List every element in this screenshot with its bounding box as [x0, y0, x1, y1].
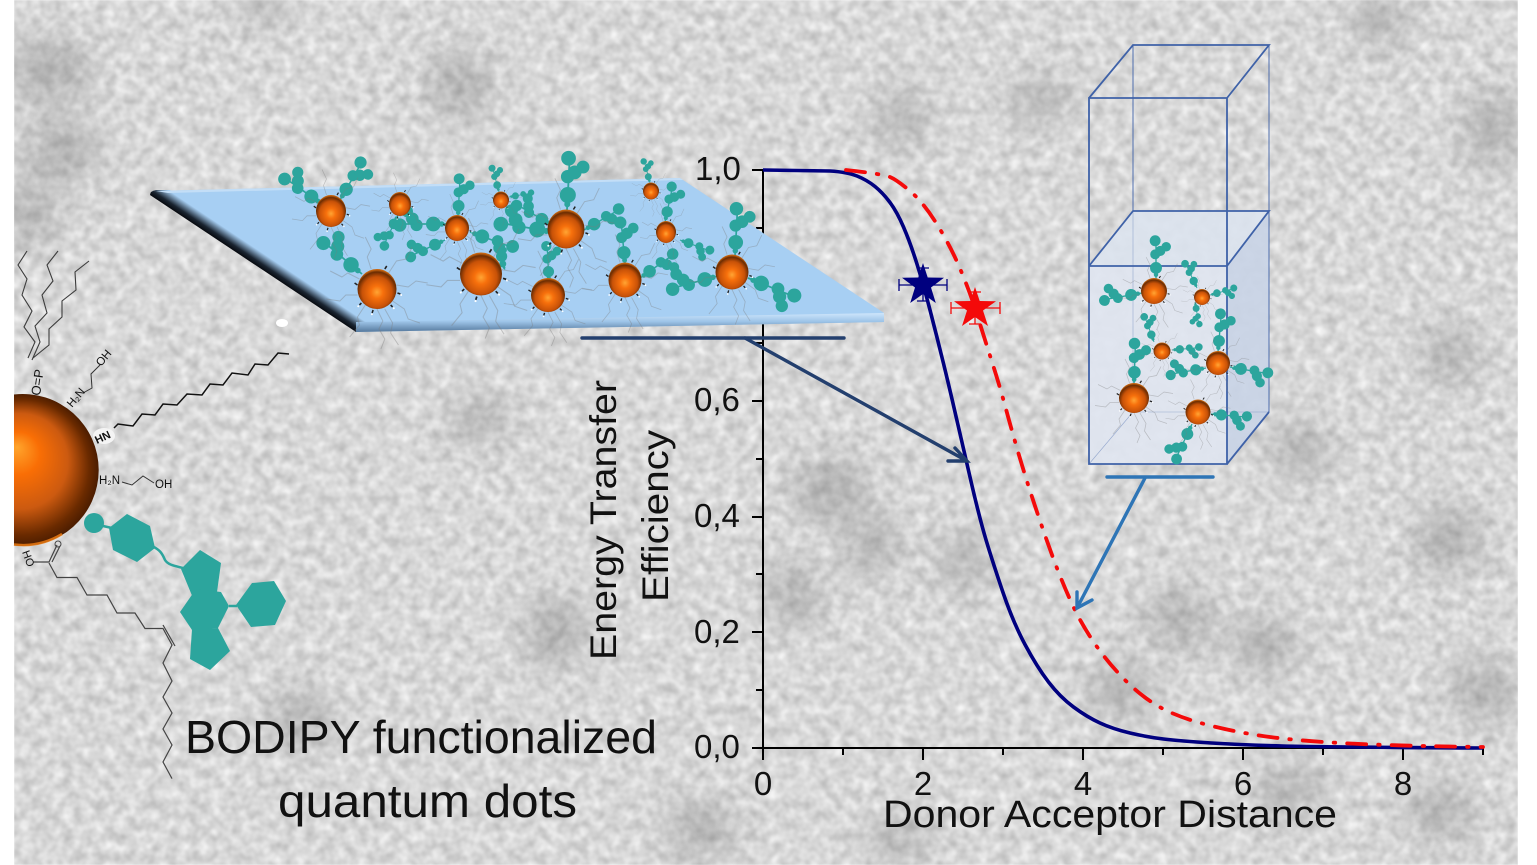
x tick labels: 2: [914, 765, 932, 802]
red star data point: [951, 287, 1000, 326]
panel: quantum dots on 2D plate: [150, 151, 884, 349]
box fill: [1089, 211, 1269, 464]
y axis title: Energy Transfer: [583, 380, 624, 660]
ligand: ethanolamine lower: OH: [155, 479, 172, 491]
caption: BODIPY functionalized: [185, 711, 657, 763]
y tick labels: [694, 150, 741, 765]
x tick labels: 8: [1394, 765, 1412, 802]
y axis title: [583, 380, 676, 660]
x axis title: Donor Acceptor Distance: [883, 794, 1337, 836]
ligand: ethanolamine upper: H₂N: [65, 386, 88, 410]
box outline: [1089, 45, 1269, 464]
y tick labels: 0,2: [694, 613, 740, 650]
caption: [185, 711, 657, 827]
red dash-dot curve: [846, 170, 1483, 747]
ligand: ethanolamine upper: [65, 348, 114, 410]
ligand: ethanolamine lower: [99, 475, 172, 491]
x tick labels: 0: [754, 765, 772, 802]
P=O label: O=P: [28, 368, 47, 396]
y tick labels: 0,4: [694, 497, 740, 534]
ligand: oleic acid: HO: [19, 549, 36, 569]
BODIPY molecule icon: [84, 513, 286, 670]
quantum dots in box: [1095, 257, 1249, 450]
quantum dots on plate: [292, 169, 775, 349]
ligand: ethanolamine upper: OH: [94, 348, 114, 369]
ligand: long amine chain: HN: [93, 429, 113, 447]
chart: energy transfer efficiency vs distance: [583, 150, 1484, 836]
caption: quantum dots: [278, 775, 577, 827]
y tick labels: 1,0: [695, 150, 741, 187]
x tick labels: 4: [1074, 765, 1092, 802]
plate: [150, 178, 884, 332]
ligand: TOPO chains: [18, 251, 89, 360]
arrow: box scale bar to red curve: [1077, 477, 1213, 608]
x axis: [762, 748, 1484, 760]
panel: single functionalized quantum dot: [14, 251, 289, 779]
x tick labels: [754, 765, 1412, 802]
arrow: plate scale bar to blue curve: [582, 338, 967, 461]
y tick labels: 0,0: [694, 728, 740, 765]
ligand: ethanolamine lower: H₂N: [99, 475, 120, 487]
y axis: [752, 169, 763, 749]
y axis title: Efficiency: [635, 429, 676, 602]
large quantum dot: [14, 394, 99, 546]
teal BODIPY groups in box: [1096, 235, 1274, 466]
y tick labels: 0,6: [694, 381, 740, 418]
x tick labels: 6: [1234, 765, 1252, 802]
blue star data point: [899, 263, 947, 303]
white speck: [276, 319, 288, 327]
ligand: oleic acid: [19, 541, 175, 779]
panel: quantum dots in 3D box: [1089, 45, 1274, 466]
blue curve: [763, 170, 1483, 748]
ligand: long amine chain: [93, 353, 289, 447]
teal BODIPY groups on plate: [276, 151, 803, 317]
